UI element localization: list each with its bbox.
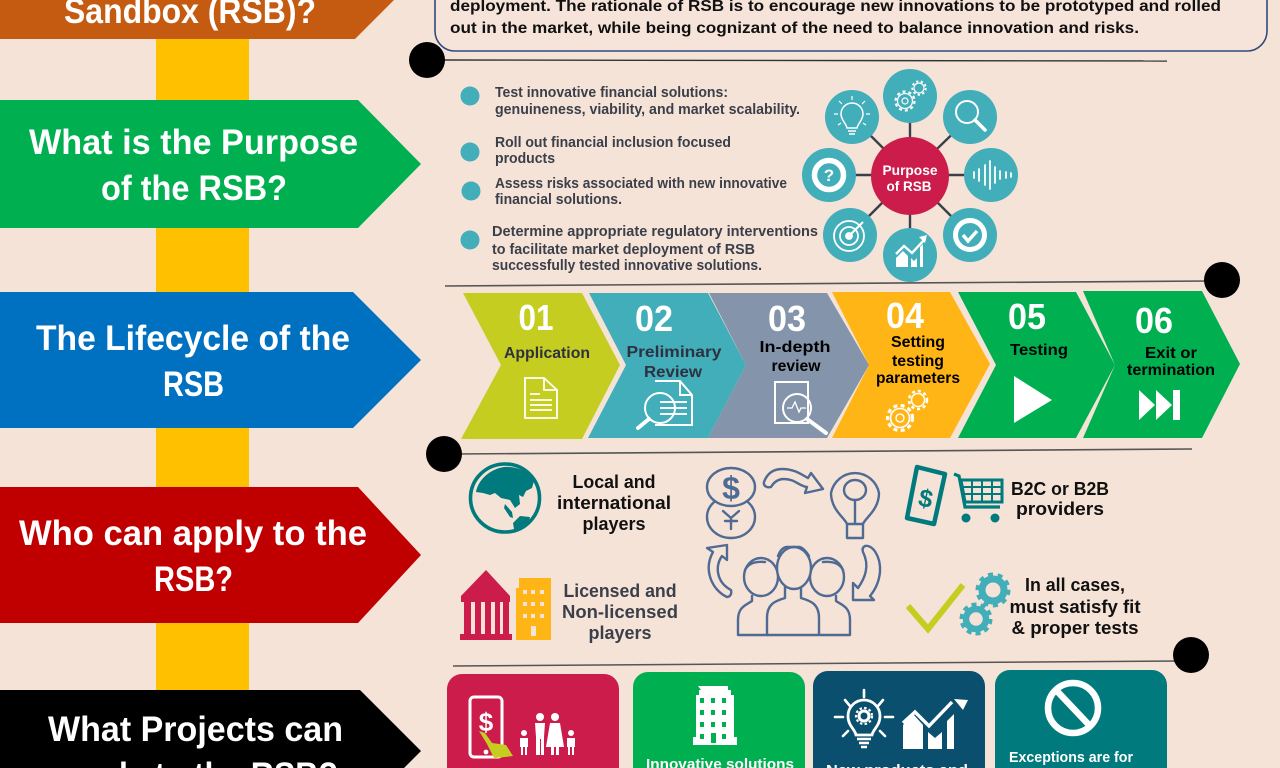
icon: scan review — [775, 382, 826, 433]
lifecycle chevron 03 — [708, 293, 869, 438]
lifecycle chevron 04: testing — [892, 353, 944, 370]
icon: globe — [470, 464, 540, 532]
icon: phone and cart — [907, 467, 1002, 524]
text: fit and proper tests: & proper tests — [1012, 618, 1138, 638]
icon: check and gears — [908, 574, 1008, 634]
purpose bullet list — [460, 84, 818, 274]
icon: document with magnifier — [638, 381, 692, 428]
icon: light bulb — [834, 96, 870, 134]
lifecycle chevron 04: Setting — [891, 334, 945, 351]
icon: gears — [896, 81, 926, 110]
banner: what is the sandbox — [0, 0, 394, 39]
text: b2c or b2b providers: providers — [1016, 499, 1104, 519]
lifecycle chevron 03: In-depth — [760, 339, 830, 356]
icon: target — [834, 221, 864, 251]
lifecycle chevron 04: 04 — [886, 295, 924, 336]
icon: money idea people cycle — [707, 468, 880, 635]
icon: check badge — [956, 220, 984, 250]
hub centre label: Purpose — [882, 162, 938, 178]
lifecycle chevron 06: termination — [1127, 362, 1215, 379]
lifecycle chevron 05: Testing — [1010, 342, 1068, 359]
text: fit and proper tests: In all cases, — [1025, 575, 1125, 595]
icon: idea bulb and growth chart — [835, 690, 968, 749]
icon: question: ? — [824, 166, 834, 185]
lifecycle chevron 06: Exit or — [1145, 345, 1197, 362]
project card: financial inclusion — [447, 674, 619, 768]
text: licensed and non-licensed players — [562, 581, 678, 643]
lifecycle chevron 02: 02 — [635, 298, 673, 339]
icon: office tower — [693, 686, 737, 745]
lifecycle chevron 04: parameters — [876, 370, 960, 387]
icon: gears — [888, 391, 927, 430]
lifecycle chevron 01: 01 — [518, 297, 554, 338]
banner: lifecycle: RSB — [163, 365, 224, 404]
project card: innovative solutions — [633, 672, 805, 768]
banner: lifecycle: The Lifecycle of the — [36, 319, 350, 358]
icon: skip forward — [1139, 390, 1180, 420]
icon: money idea people cycle: $ — [722, 470, 740, 506]
banner: purpose — [0, 100, 421, 228]
purpose hub diagram — [802, 69, 1018, 282]
icon: document — [525, 378, 557, 418]
banner: who can apply: Who can apply to the — [19, 514, 367, 553]
text: licensed and non-licensed players: Non-licensed — [562, 602, 678, 622]
text: local and international players: Local and — [572, 472, 656, 492]
section divider 1 — [409, 42, 1167, 78]
lifecycle chevron 05: 05 — [1008, 296, 1046, 337]
banner: what projects: What Projects can — [48, 710, 343, 749]
vertical connector bar — [156, 38, 249, 698]
lifecycle chevron 01: Application — [504, 345, 590, 362]
purpose bullet list: products — [495, 150, 555, 167]
section divider 4 — [453, 637, 1209, 673]
icon: magnifier — [956, 101, 985, 130]
icon: phone and family: $ — [479, 707, 494, 737]
icon: question — [814, 160, 844, 190]
icon: phone and family — [470, 697, 575, 758]
project card: exceptions: Exceptions are for — [1009, 750, 1133, 766]
text: fit and proper tests: must satisfy fit — [1010, 597, 1141, 617]
lifecycle chevron 02 — [588, 293, 746, 438]
callout: sandbox definition — [435, 0, 1267, 51]
text: b2c or b2b providers — [1011, 479, 1109, 519]
lifecycle chevron 05 — [958, 292, 1115, 438]
lifecycle chevron 06 — [1083, 291, 1240, 438]
text: local and international players: players — [582, 514, 646, 534]
lifecycle chevron 03: review — [772, 358, 821, 375]
callout: sandbox definition: out in the market, while being cognizant of the need to balance innovation and risks. — [450, 20, 1139, 37]
icon: phone and cart: $ — [916, 484, 935, 514]
icon: sound wave — [974, 161, 1011, 189]
purpose bullet list: to facilitate market deployment of RSB — [492, 241, 755, 258]
hub centre label: of RSB — [886, 178, 932, 194]
purpose bullet list: Roll out financial inclusion focused — [495, 134, 731, 151]
icon: bank and office building — [460, 570, 551, 640]
lifecycle chevron 03: 03 — [768, 298, 806, 339]
icon: play — [1014, 376, 1052, 423]
lifecycle chevron 06: 06 — [1135, 300, 1173, 341]
text: local and international players — [557, 472, 671, 534]
purpose bullet list: financial solutions. — [495, 191, 622, 208]
icon: growth chart — [896, 235, 927, 267]
icon: prohibited sign — [1048, 683, 1098, 733]
section divider 2 — [445, 262, 1240, 298]
text: local and international players: international — [557, 493, 671, 513]
banner: purpose: of the RSB? — [101, 169, 287, 208]
text: fit and proper tests — [1010, 575, 1141, 638]
banner: lifecycle — [0, 292, 421, 428]
lifecycle chevron 02: Preliminary — [626, 344, 722, 361]
project card: new products — [813, 671, 985, 768]
hub centre label — [871, 137, 949, 215]
banner: purpose: What is the Purpose — [29, 123, 358, 162]
purpose bullet list: Determine appropriate regulatory interventions — [492, 223, 818, 240]
purpose bullet list: successfully tested innovative solutions. — [492, 257, 762, 274]
banner: who can apply — [0, 487, 421, 623]
section divider 3 — [426, 436, 1192, 472]
lifecycle chevron 04 — [832, 292, 990, 438]
lifecycle chevron 02: Review — [644, 364, 703, 381]
purpose bullet list: Test innovative financial solutions: — [495, 84, 728, 101]
purpose bullet list: genuineness, viability, and market scalability. — [495, 101, 800, 118]
banner: what projects — [0, 690, 421, 768]
lifecycle chevron 01 — [461, 293, 620, 439]
text: licensed and non-licensed players: players — [588, 623, 652, 643]
project card: exceptions — [995, 670, 1167, 768]
text: licensed and non-licensed players: Licensed and — [564, 581, 676, 601]
purpose bullet list: Assess risks associated with new innovative — [495, 175, 787, 192]
text: b2c or b2b providers: B2C or B2B — [1011, 479, 1109, 499]
banner: who can apply: RSB? — [154, 560, 233, 599]
